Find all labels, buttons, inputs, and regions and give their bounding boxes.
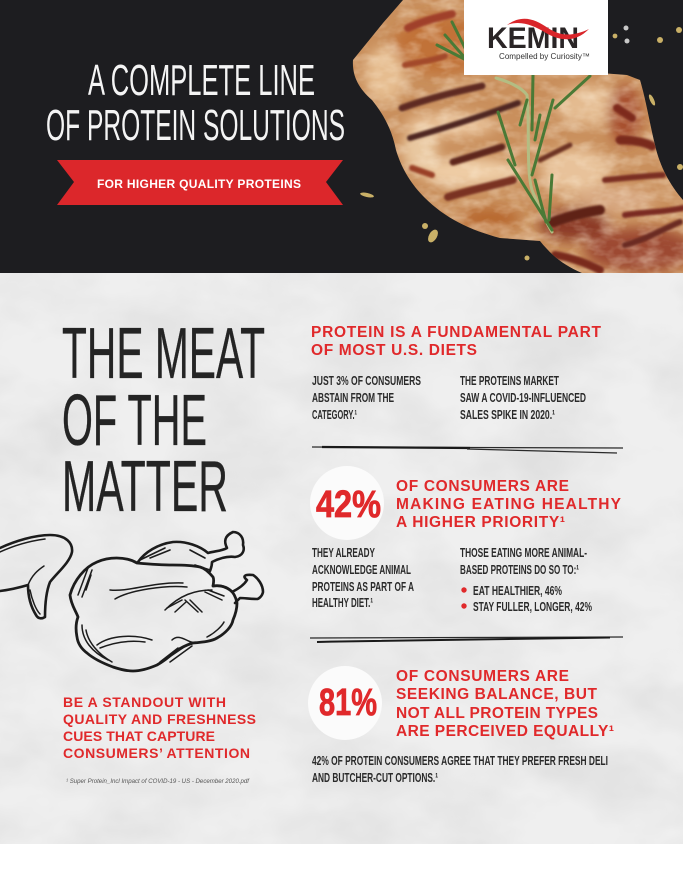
heading: SEEKING BALANCE, BUT: [396, 686, 598, 703]
image: grilled steak: [345, 0, 683, 273]
heading: NOT ALL PROTEIN TYPES: [396, 705, 598, 722]
text: animal-based: THOSE EATING MORE ANIMAL-: [460, 545, 587, 560]
heading: OF CONSUMERS ARE: [396, 478, 569, 495]
callout: be a standout: [63, 694, 256, 761]
text: acknowledge: THEY ALREADY: [312, 545, 375, 560]
panel: 42 percent: [310, 466, 622, 614]
stat circle: [310, 466, 384, 540]
front drumstick: [213, 575, 263, 603]
text: abstain: [312, 373, 421, 422]
text: market: THE PROTEINS MARKET: [460, 373, 559, 388]
ribbon banner: FOR HIGHER QUALITY PROTEINS: [97, 177, 301, 191]
panel: 81 percent: [308, 666, 614, 785]
callout: be a standout: CONSUMERS’ ATTENTION: [63, 745, 250, 761]
text: market: SALES SPIKE IN 2020.¹: [460, 407, 555, 422]
text: animal-based: [460, 545, 587, 577]
text: abstain: CATEGORY.¹: [312, 407, 357, 422]
text: market: SAW A COVID-19-INFLUENCED: [460, 390, 586, 405]
text: abstain: JUST 3% OF CONSUMERS: [312, 373, 421, 388]
panel: protein fundamental: [311, 324, 602, 422]
stat circle: 42%: [316, 484, 381, 526]
bullet list: EAT HEALTHIER, 46%: [473, 583, 562, 598]
heading: OF MOST U.S. DIETS: [311, 342, 477, 359]
ribbon banner: [57, 160, 343, 205]
callout: be a standout: BE A STANDOUT WITH: [63, 694, 226, 710]
wing: [0, 535, 72, 618]
icon: rosemary sprig: [437, 22, 590, 232]
text: acknowledge: PROTEINS AS PART OF A: [312, 579, 414, 594]
title: A COMPLETE LINE: [88, 56, 315, 105]
logo wordmark: KEMIN: [487, 22, 579, 55]
title: OF PROTEIN SOLUTIONS: [46, 101, 345, 150]
stat circle: [308, 666, 382, 740]
rear leg: [138, 532, 244, 571]
text: fresh deli: [312, 753, 608, 785]
text: acknowledge: [312, 545, 414, 610]
logo tagline: Compelled by Curiosity™: [499, 52, 590, 61]
bullet list: [461, 583, 592, 614]
heading: PROTEIN IS A FUNDAMENTAL PART: [311, 324, 602, 341]
heading: ARE PERCEIVED EQUALLY¹: [396, 723, 614, 740]
heading: [311, 324, 602, 359]
callout: be a standout: CUES THAT CAPTURE: [63, 728, 215, 744]
panel: header photo: [0, 0, 683, 273]
logo box: [464, 0, 608, 75]
stat circle: 81%: [319, 682, 377, 724]
heading: OF CONSUMERS ARE: [396, 668, 569, 685]
heading: the meat of the matter: [62, 314, 265, 527]
panel: paper background: [0, 273, 683, 844]
heading: the meat of the matter: MATTER: [62, 447, 228, 527]
logo swoosh: [507, 19, 589, 39]
text: abstain: ABSTAIN FROM THE: [312, 390, 394, 405]
text: market: [460, 373, 586, 422]
heading: the meat of the matter: THE MEAT: [62, 314, 265, 394]
heading: [396, 668, 614, 740]
details: [97, 583, 224, 648]
heading: MAKING EATING HEALTHY: [396, 496, 622, 513]
heading: [396, 478, 622, 531]
footnote: ¹ Super Protein_Incl Impact of COVID-19 - US - December 2020.pdf: [66, 778, 250, 785]
title: [47, 64, 344, 140]
specks of seasoning: [360, 26, 683, 260]
text: animal-based: BASED PROTEINS DO SO TO:¹: [460, 562, 579, 577]
heading: the meat of the matter: OF THE: [62, 381, 207, 461]
heading: A HIGHER PRIORITY¹: [396, 514, 565, 531]
bullet list: STAY FULLER, LONGER, 42%: [473, 599, 592, 614]
text: acknowledge: HEALTHY DIET.¹: [312, 595, 373, 610]
icon: roast chicken illustration: [0, 532, 263, 671]
text: acknowledge: ACKNOWLEDGE ANIMAL: [312, 562, 411, 577]
callout: be a standout: QUALITY AND FRESHNESS: [63, 711, 256, 727]
text: fresh deli: AND BUTCHER-CUT OPTIONS.¹: [312, 770, 438, 785]
body: [70, 558, 237, 671]
